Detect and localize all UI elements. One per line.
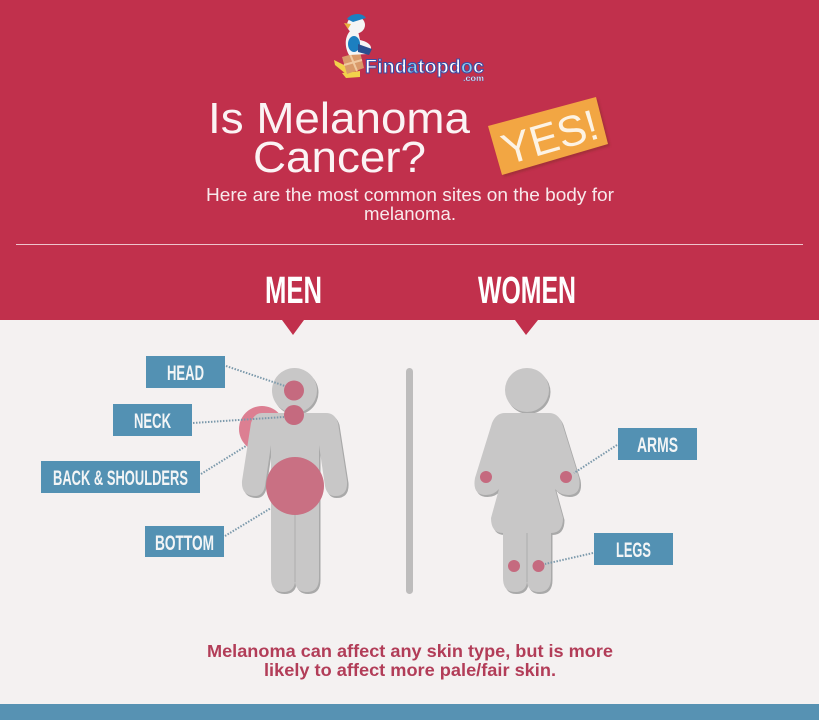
label: back and shoulders: BACK & SHOULDERS (53, 467, 188, 490)
label: legs (594, 533, 673, 565)
logo (334, 14, 484, 83)
label: back and shoulders (41, 461, 200, 493)
label: head: HEAD (167, 362, 204, 385)
figure: man (239, 368, 349, 594)
subtitle: melanoma. (364, 204, 456, 224)
callout: YES badge: YES! (496, 101, 604, 175)
logo wordmark: Findatopdoc (365, 57, 484, 78)
label: bottom (145, 526, 224, 557)
bottom marker (266, 457, 324, 515)
logo wordmark: .com (463, 74, 484, 83)
back and shoulders marker (239, 406, 285, 452)
arm markers (480, 471, 572, 483)
footer statement: Melanoma can affect any skin type, but is more (207, 641, 613, 661)
label: arms: ARMS (637, 434, 678, 457)
connector lines (193, 366, 617, 564)
subtitle: Here are the most common sites on the body for (206, 185, 614, 205)
heading: men (265, 270, 322, 335)
heading: men: MEN (265, 270, 322, 312)
heading: women: WOMEN (478, 270, 576, 312)
divider bar (406, 368, 413, 594)
title: Is Melanoma (208, 94, 471, 143)
label: arms (618, 428, 697, 460)
title: Cancer? (253, 133, 426, 182)
footer statement: likely to affect more pale/fair skin. (264, 660, 556, 680)
label: neck: NECK (134, 410, 171, 433)
label: legs: LEGS (616, 539, 651, 562)
footer statement (207, 641, 613, 680)
label: bottom: BOTTOM (155, 532, 214, 555)
man silhouette shadow (243, 370, 349, 594)
icon: duck mascot (334, 14, 372, 78)
subtitle (206, 185, 614, 224)
man silhouette (242, 368, 347, 592)
bottom bar (0, 704, 819, 720)
label: neck (113, 404, 192, 436)
figure: woman (474, 368, 581, 594)
neck marker (284, 405, 304, 425)
heading: women (478, 270, 576, 335)
woman silhouette (474, 368, 580, 592)
title (208, 94, 471, 182)
header band (0, 0, 819, 320)
woman silhouette shadow (476, 370, 581, 594)
leg markers (508, 560, 544, 572)
arrow: men pointer (282, 320, 304, 335)
arrow: women pointer (515, 320, 538, 335)
head marker (284, 380, 304, 400)
label: head (146, 356, 225, 388)
